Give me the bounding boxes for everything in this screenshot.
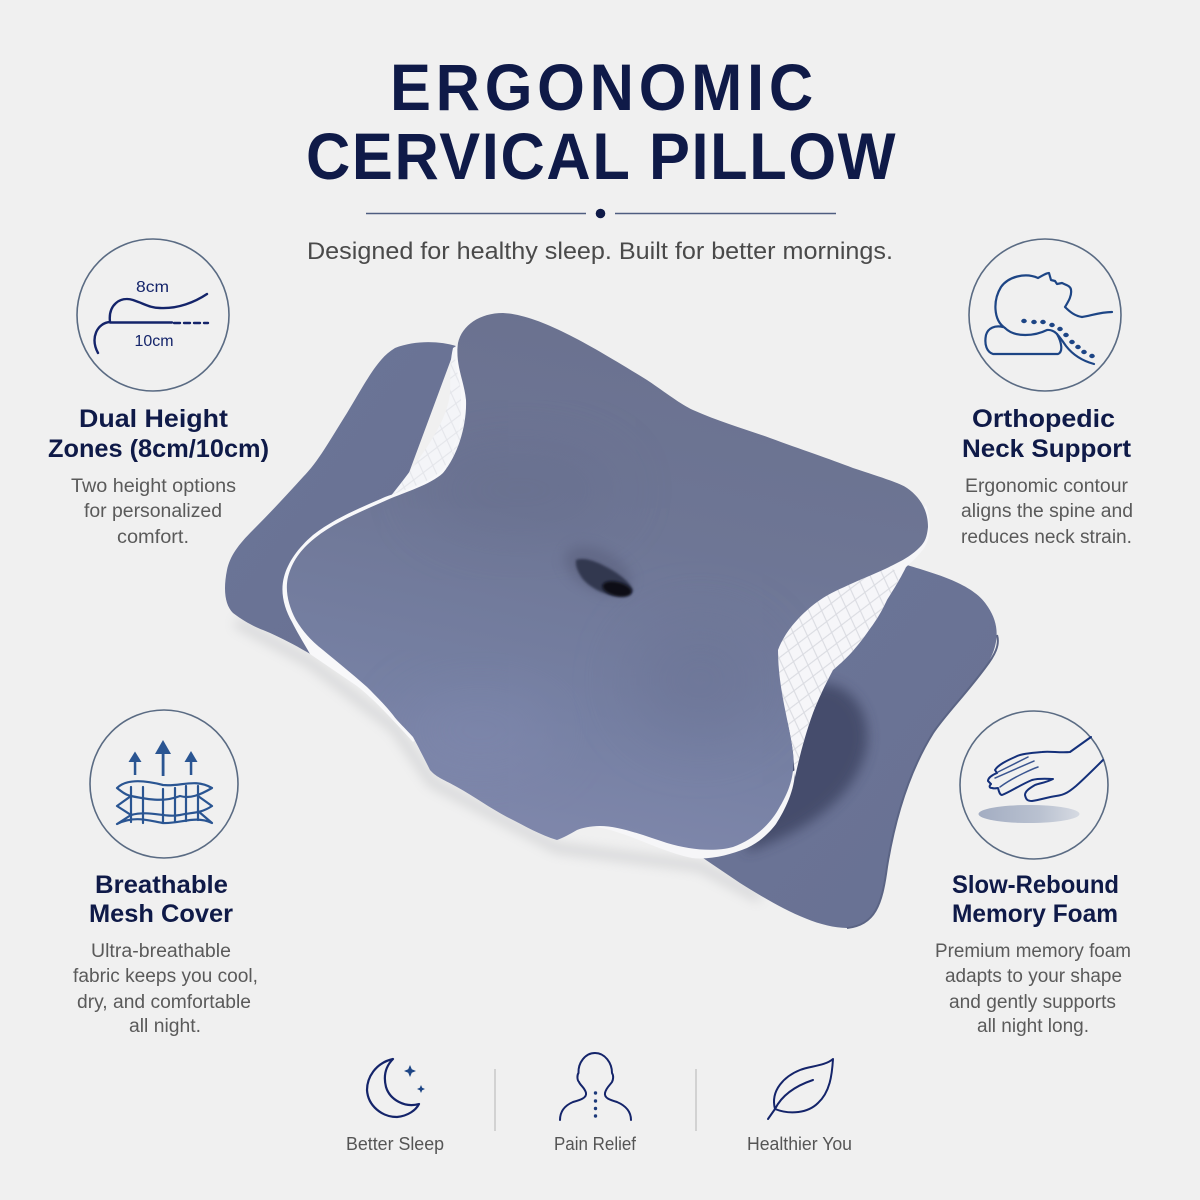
description: fabric keeps you cool,: [73, 966, 258, 987]
panel: dual height zones: [48, 239, 269, 548]
description: reduces neck strain.: [961, 527, 1132, 548]
description: [73, 941, 258, 1037]
divider: [695, 1069, 697, 1131]
description: Ultra-breathable: [91, 941, 231, 962]
heading: [48, 405, 269, 463]
description: and gently supports: [949, 992, 1116, 1013]
description: [935, 941, 1131, 1037]
description: all night long.: [977, 1016, 1089, 1037]
title: [306, 50, 896, 193]
description: dry, and comfortable: [77, 992, 251, 1013]
heading: Mesh Cover: [89, 900, 233, 928]
heading: Dual Height: [79, 405, 229, 433]
label: Better Sleep: [346, 1134, 444, 1154]
divider: [494, 1069, 496, 1131]
heading: Zones (8cm/10cm): [48, 435, 269, 463]
icon: height profile: [77, 239, 229, 391]
description: comfort.: [117, 527, 189, 548]
lower pillow layer: right wing: [703, 565, 997, 928]
description: [71, 476, 236, 548]
white quilted panel: left: [390, 345, 470, 497]
heading: Breathable: [95, 871, 228, 899]
heading: [952, 871, 1119, 928]
heading: Neck Support: [962, 435, 1132, 463]
benefit: better sleep: [346, 1059, 444, 1154]
label: Healthier You: [747, 1134, 852, 1154]
description: all night.: [129, 1016, 201, 1037]
title: ERGONOMIC: [390, 50, 813, 124]
icon: head on pillow with spine: [969, 239, 1121, 391]
description: adapts to your shape: [945, 966, 1122, 987]
white edge band: left and lower left: [282, 345, 470, 742]
description: Ergonomic contour: [965, 476, 1129, 497]
description: aligns the spine and: [961, 501, 1133, 522]
icon: height profile: 10cm: [134, 333, 174, 350]
panel: breathable mesh cover: [73, 710, 258, 1037]
pillow illustration: [225, 313, 998, 928]
description: for personalized: [84, 501, 222, 522]
white quilted panel: right: [775, 565, 907, 777]
description: Two height options: [71, 476, 236, 497]
heading: [962, 405, 1132, 463]
description: Premium memory foam: [935, 941, 1131, 962]
heading: Slow-Rebound: [952, 871, 1119, 899]
icon: moon and stars: [367, 1059, 425, 1117]
icon: hand over foam: [960, 711, 1108, 859]
panel: orthopedic neck support: [961, 239, 1133, 548]
lower pillow layer: left wing: [225, 342, 456, 655]
white edge band: upper right: [880, 505, 930, 572]
subtitle: Designed for healthy sleep. Built for better mornings.: [307, 238, 893, 265]
top pillow surface: [287, 313, 928, 850]
label: Pain Relief: [554, 1134, 637, 1154]
lower pillow right edge: [847, 635, 998, 928]
lower pillow cast shadow: [745, 684, 867, 852]
icon: leaf: [768, 1059, 833, 1119]
centre hole: [557, 536, 639, 604]
icon: neck and shoulders: [560, 1053, 631, 1120]
icon: height profile: 8cm: [136, 279, 169, 296]
title divider: [366, 209, 836, 218]
benefit: pain relief: [554, 1053, 637, 1154]
icon: mesh with arrows: [90, 710, 238, 858]
pillow ground shadow: [236, 622, 760, 898]
benefit: healthier you: [747, 1059, 852, 1154]
white edge band: lower right: [590, 770, 795, 858]
heading: Memory Foam: [952, 900, 1118, 928]
surface shading: [400, 445, 770, 770]
description: [961, 476, 1133, 548]
title: CERVICAL PILLOW: [306, 119, 896, 193]
panel: slow-rebound memory foam: [935, 711, 1131, 1037]
heading: [89, 871, 233, 928]
heading: Orthopedic: [972, 405, 1115, 433]
